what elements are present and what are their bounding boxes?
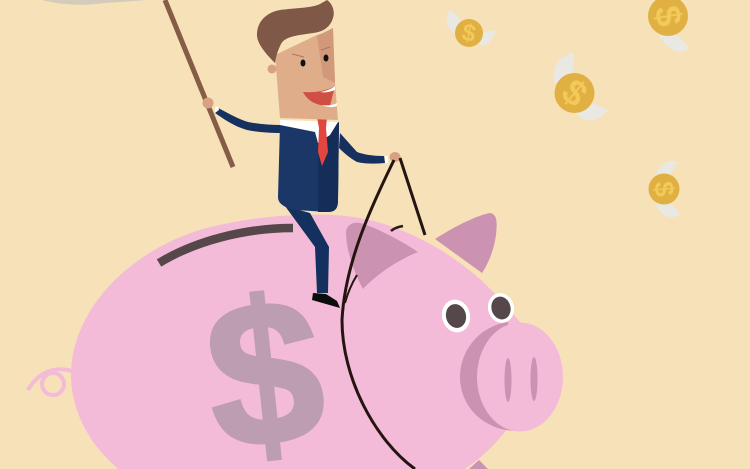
coin: middle: $ <box>554 70 596 115</box>
eyebrows <box>292 47 330 57</box>
coin: top left <box>446 10 496 48</box>
upper teeth <box>320 86 335 92</box>
left arm <box>215 108 281 133</box>
shirt collar <box>280 120 338 143</box>
small ear mark <box>391 226 403 231</box>
right arm <box>339 133 385 164</box>
coin: top left: $ <box>460 19 479 48</box>
pig far ear <box>435 213 497 273</box>
coin: middle <box>554 53 608 121</box>
leg <box>285 206 329 293</box>
left hand <box>202 98 214 108</box>
coin: top right <box>647 0 690 52</box>
eyes <box>300 60 306 66</box>
left cuff <box>215 106 219 113</box>
right hand <box>390 152 400 162</box>
coin: top right: $ <box>647 2 690 29</box>
pig snout <box>460 322 563 432</box>
pig left eye <box>438 296 474 336</box>
coin slot <box>159 228 293 263</box>
right cuff <box>385 156 388 163</box>
coin: lower right: $ <box>648 180 680 198</box>
icon: pig tail <box>28 369 72 395</box>
flag pole <box>165 0 233 167</box>
ear <box>268 64 276 74</box>
face shadow <box>317 28 335 83</box>
pig near ear <box>346 223 418 289</box>
businessman <box>202 0 400 308</box>
pig back leg hint <box>469 460 488 469</box>
pig right eye <box>485 290 517 326</box>
reins <box>342 158 425 469</box>
jacket dark front panel <box>318 122 339 212</box>
shoe <box>312 293 340 308</box>
lower teeth <box>322 103 337 107</box>
neck and face <box>275 30 338 120</box>
suit jacket <box>278 122 339 212</box>
pig body <box>71 214 526 469</box>
red tie <box>317 117 328 166</box>
hair <box>257 0 334 63</box>
white flag <box>42 0 147 5</box>
coin: lower right <box>648 161 680 217</box>
mouth <box>303 86 335 106</box>
